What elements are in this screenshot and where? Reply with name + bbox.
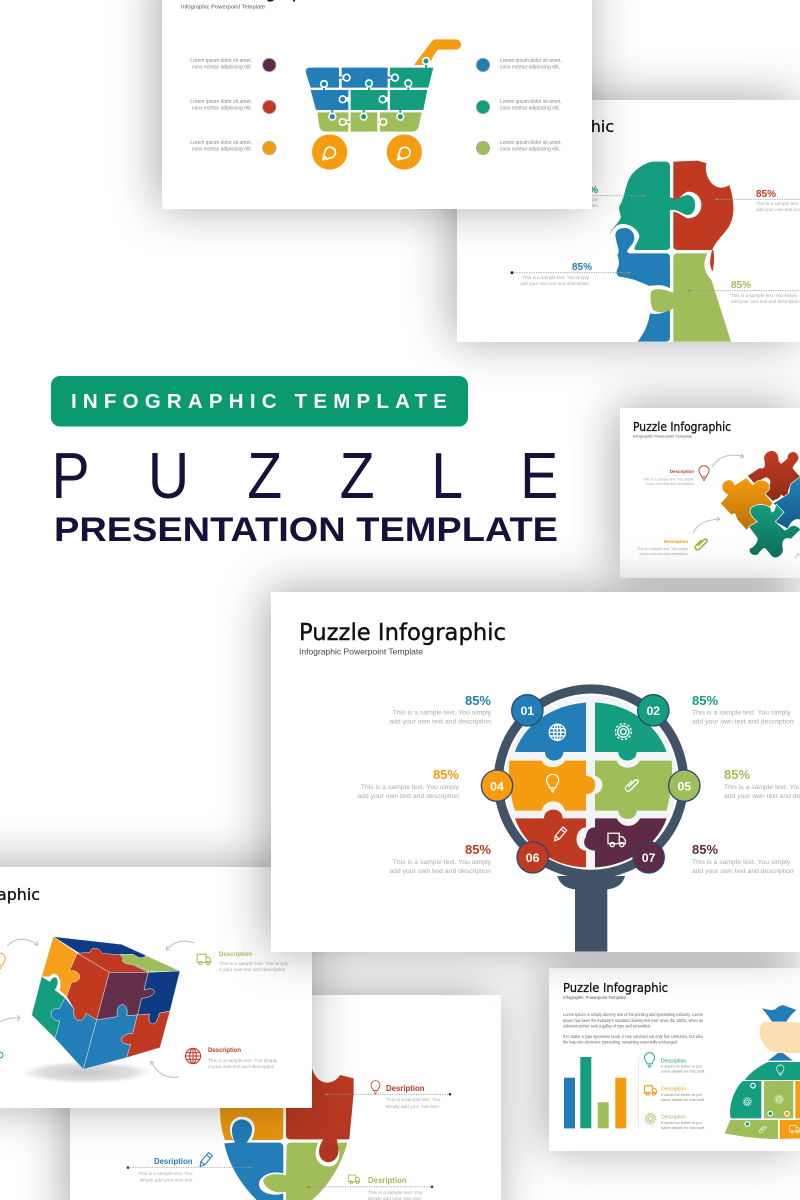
icon: cube truck xyxy=(197,954,211,965)
label: cube green xyxy=(219,952,289,973)
stat: 04: This is a sample text. You simply xyxy=(361,784,460,791)
captions: cart left: Lorem ipsum dolor sit amet, xyxy=(190,58,252,64)
label: shield blue: This is a sample text. You xyxy=(138,1171,193,1177)
captions: head: description xyxy=(576,203,598,208)
icon: cube globe xyxy=(185,1048,201,1064)
captions: head: This is a sample text. You simply xyxy=(731,293,798,298)
label: jigsaw description orange xyxy=(637,539,688,556)
hero badge xyxy=(51,376,468,426)
label: cube red xyxy=(208,1048,278,1070)
label: jigsaw description red: This is a sample text. You simply xyxy=(643,478,694,482)
color markers: cart right xyxy=(476,58,490,155)
stat: 02: This is a sample text. You simply xyxy=(692,710,791,716)
badge numbers: 01 xyxy=(520,704,534,718)
bar chart xyxy=(564,1057,626,1128)
marker dots: shield xyxy=(127,1093,451,1188)
shield puzzle illustration xyxy=(220,1067,354,1200)
leader lines: shield xyxy=(128,1094,450,1187)
body text: money bag: Ipsum has been the industry's standard dummy text ever since the 1500s, when an xyxy=(563,1018,704,1023)
stat labels: head: 85% xyxy=(572,262,592,273)
panel: cube slide xyxy=(0,867,312,1108)
label: money bag green: some details for this stuff. xyxy=(661,1125,705,1130)
captions: cart right: cons ectetur adipiscing elit. xyxy=(500,64,560,70)
captions: cart right: Lorem ipsum dolor sit amet, xyxy=(500,99,562,105)
stat: 01: add your own text and description xyxy=(389,718,491,726)
icon: money bag gear xyxy=(645,1113,656,1124)
badge numbers: 06 xyxy=(526,851,540,865)
captions: cart left: Lorem ipsum dolor sit amet, xyxy=(190,140,252,146)
cart knob fills xyxy=(324,61,426,122)
marker dot: head blue xyxy=(510,271,514,274)
body text: money bag: It to make a type specimen book. It has survived not only five centuries, but also xyxy=(563,1034,704,1039)
captions: cart left: cons ectetur adipiscing elit. xyxy=(192,64,252,70)
label: shield red: This is a sample text. You xyxy=(386,1097,441,1103)
label: shield red xyxy=(386,1084,441,1110)
stat: 01: This is a sample text. You simply xyxy=(393,710,492,716)
label: cube green: This is a sample text. You simply xyxy=(219,961,289,967)
label: jigsaw description red: Description xyxy=(670,469,694,474)
icon: cube orange bulb xyxy=(0,953,5,968)
magnifier icons xyxy=(547,724,639,847)
jigsaw pieces illustration xyxy=(720,451,800,558)
panel: magnifier slide xyxy=(271,592,800,952)
label: money bag teal: It would be better to put xyxy=(661,1064,703,1068)
panel: shopping cart slide xyxy=(162,0,592,209)
stat: 05 xyxy=(724,767,800,800)
icon: money bag bulb xyxy=(644,1053,655,1067)
label: jigsaw description orange: d your own text and description xyxy=(640,552,688,556)
slide title: money bag: Puzzle Infographic xyxy=(563,980,668,995)
stat: 04: 85% xyxy=(433,767,459,782)
label: shield blue: simply add your own text xyxy=(140,1178,193,1184)
badge numbers: 07 xyxy=(642,851,656,865)
label: jigsaw description red: d your own text and description xyxy=(646,482,694,486)
label: money bag teal: Description xyxy=(661,1058,686,1064)
captions: head xyxy=(520,197,800,304)
stat: 04: add your own text and description xyxy=(357,793,459,800)
label: money bag orange: Description xyxy=(661,1086,686,1092)
stat: 05: 85% xyxy=(724,767,750,782)
captions: cart left: cons ectetur adipiscing elit. xyxy=(192,106,252,112)
stat: 02 xyxy=(692,693,794,726)
captions: cart right: cons ectetur adipiscing elit. xyxy=(500,106,560,112)
stat: 06: This is a sample text. You simply xyxy=(393,859,492,866)
label: cube red: Description xyxy=(208,1048,241,1054)
icon: shield pencil xyxy=(198,1153,212,1168)
label: money bag orange: some details for this stuff. xyxy=(661,1097,705,1102)
label: shield green xyxy=(368,1176,423,1200)
stat labels: head: 85% xyxy=(731,280,751,291)
captions: cart right: Lorem ipsum dolor sit amet, xyxy=(500,58,562,64)
stat: 06: 85% xyxy=(465,842,491,857)
captions: cart left: Lorem ipsum dolor sit amet, xyxy=(190,99,252,105)
stat: 04 xyxy=(357,767,460,800)
stat: 02: 85% xyxy=(692,693,718,708)
slide subtitle: money bag: Infographic Powerpoint Template xyxy=(563,995,626,1000)
captions: cart right xyxy=(500,58,562,152)
captions: cart right: Lorem ipsum dolor sit amet, xyxy=(500,140,562,146)
hero subtitle: PRESENTATION TEMPLATE xyxy=(54,511,558,549)
badge numbers: 04 xyxy=(490,779,504,793)
icon: paperclip xyxy=(694,537,708,551)
stat: 01 xyxy=(389,693,492,726)
icon: cube teal marker xyxy=(0,1052,3,1058)
label: cube red: d your own text and description xyxy=(208,1064,275,1070)
hero badge: INFOGRAPHIC TEMPLATE xyxy=(71,390,447,413)
label: money bag green: Description xyxy=(661,1114,686,1120)
label: shield red: Desription xyxy=(386,1084,425,1093)
label: jigsaw description orange: This is a sample text. You simply xyxy=(637,547,688,551)
label: money bag teal: some details for this stuff. xyxy=(661,1068,705,1074)
label: cube green: d your own text and description xyxy=(219,967,286,973)
label: shield green: Desription xyxy=(368,1176,407,1185)
badge numbers xyxy=(490,704,691,865)
slide subtitle: magnifier: Infographic Powerpoint Template xyxy=(299,646,423,656)
captions: head: You simply xyxy=(576,197,599,202)
stat labels: head xyxy=(572,185,776,291)
badge numbers: 02 xyxy=(646,704,660,718)
slide title: jigsaw: Puzzle Infographic xyxy=(633,420,731,434)
cart knob outlines xyxy=(324,61,426,122)
stat: 02: add your own text and description xyxy=(692,718,794,726)
label: shield red: simply add your own text xyxy=(386,1104,439,1110)
stat: 06: add your own text and description xyxy=(389,868,491,875)
panel: jigsaw pieces slide xyxy=(620,408,800,578)
slide title: magnifier: Puzzle Infographic xyxy=(299,620,506,646)
numbered badges xyxy=(481,695,700,873)
cart puzzle illustration xyxy=(306,39,461,170)
slide title: head: Puzzle Infographic xyxy=(470,117,614,136)
stat: 06 xyxy=(389,842,492,875)
label: jigsaw description orange: Description xyxy=(664,539,688,544)
label: cube green: Description xyxy=(219,952,252,958)
captions: cart left: cons ectetur adipiscing elit. xyxy=(192,146,252,152)
captions: head: This is a sample text. You simply xyxy=(523,275,590,280)
slide subtitle: cart: Infographic Powerpoint Template xyxy=(181,4,265,10)
magnifier puzzle illustration xyxy=(481,689,700,952)
hero title: PUZZLE: PUZZLE xyxy=(51,440,558,512)
stat labels: head: 85% xyxy=(578,185,598,196)
badge numbers: 05 xyxy=(677,779,691,793)
stat: 07 xyxy=(692,842,794,875)
label: money bag orange: It would be better to put xyxy=(661,1092,703,1097)
body text: money bag xyxy=(563,1012,704,1044)
label: jigsaw description red xyxy=(643,469,694,486)
captions: head: add your own text and description xyxy=(731,299,800,304)
icon: shield bulb xyxy=(371,1081,380,1093)
color markers: cart left xyxy=(263,58,276,155)
panel: money bag slide xyxy=(549,968,800,1151)
curved arrows: cube xyxy=(0,939,194,1077)
body text: money bag: Lorem Ipsum is simply dummy text of the printing and typesetting industry. Lorem xyxy=(563,1012,703,1017)
label: money bag green xyxy=(661,1114,705,1130)
body text: money bag: unknown printer took a galley of type and scrambled xyxy=(563,1024,651,1028)
label: shield blue: Desription xyxy=(154,1157,193,1166)
stat: 07: This is a sample text. You simply xyxy=(692,859,791,866)
leader lines: head xyxy=(512,196,800,291)
captions: cart left xyxy=(190,58,252,152)
label: money bag teal xyxy=(661,1058,705,1074)
curved arrows: jigsaw xyxy=(693,454,800,558)
money bag illustration xyxy=(725,1005,800,1139)
label: money bag orange xyxy=(661,1086,705,1102)
stat: 07: add your own text and description xyxy=(692,868,794,875)
label: money bag green: It would be better to put xyxy=(661,1120,703,1125)
icon: money bag truck xyxy=(644,1086,656,1095)
panel: shield puzzle slide xyxy=(70,995,501,1200)
body text: money bag: the leap into electronic typesetting, remaining essentially unchanged. xyxy=(563,1040,678,1044)
head puzzle illustration xyxy=(610,161,733,342)
stat: 01: 85% xyxy=(465,693,491,708)
label: cube red: This is a sample text. You simply xyxy=(208,1058,278,1064)
panel: head puzzle slide xyxy=(457,100,800,342)
captions: cart right: cons ectetur adipiscing elit. xyxy=(500,146,560,152)
label: shield green: This is a sample text. You xyxy=(368,1190,423,1196)
icon: red bulb xyxy=(699,466,709,480)
cube puzzle illustration xyxy=(22,937,180,1083)
stat labels: head: 85% xyxy=(756,189,776,200)
captions: head: add your own text and description xyxy=(520,281,589,286)
stat: 07: 85% xyxy=(692,842,718,857)
icon: shield truck xyxy=(348,1175,360,1184)
label: shield blue xyxy=(138,1157,193,1184)
slide subtitle: jigsaw: Infographic Powerpoint Template xyxy=(633,434,693,438)
